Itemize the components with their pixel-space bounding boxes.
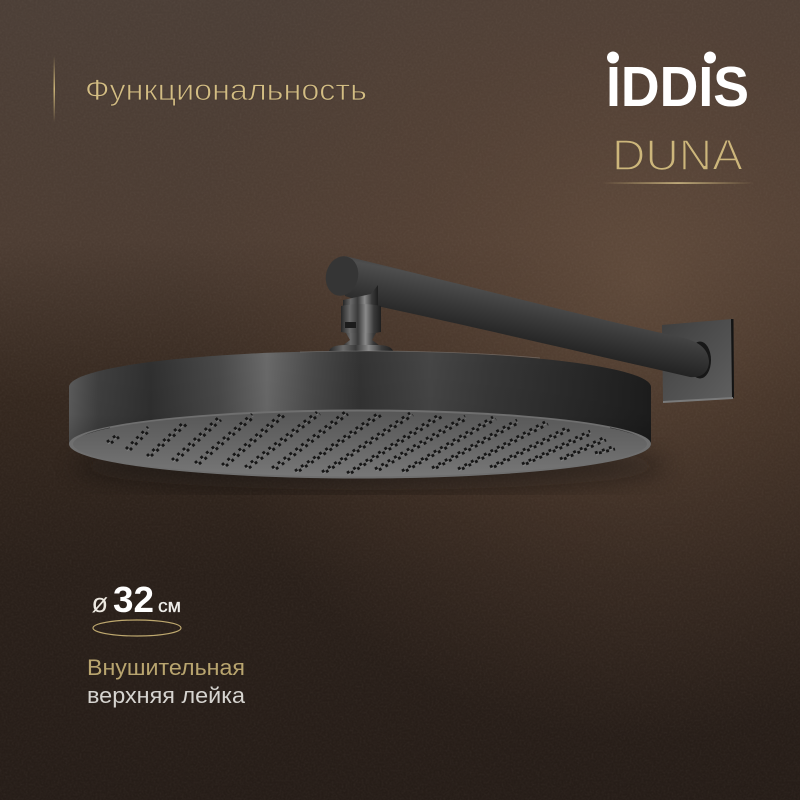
swivel joint [329,285,393,351]
icon: ellipse diameter outline [93,620,181,636]
caption [87,655,246,708]
caption: Внушительная [87,655,245,680]
logo: IDDIS: IDDIS [606,55,749,119]
heading: functionality: Функциональность [85,74,367,107]
diameter value: 32 [113,579,154,620]
shower head [69,351,651,478]
diameter value: см [158,596,181,616]
diameter value [92,579,181,620]
rim of shower head [69,351,651,478]
shower arm [345,256,711,378]
icon: wall mounting plate [662,319,734,403]
diameter value: ø [92,588,108,618]
arm end cap [322,253,362,299]
series name: DUNA: DUNA [612,131,744,180]
shadow under shower head [74,442,666,490]
spray face [69,410,651,478]
caption: верхняя лейка [87,683,246,708]
nozzle rows [107,412,615,474]
